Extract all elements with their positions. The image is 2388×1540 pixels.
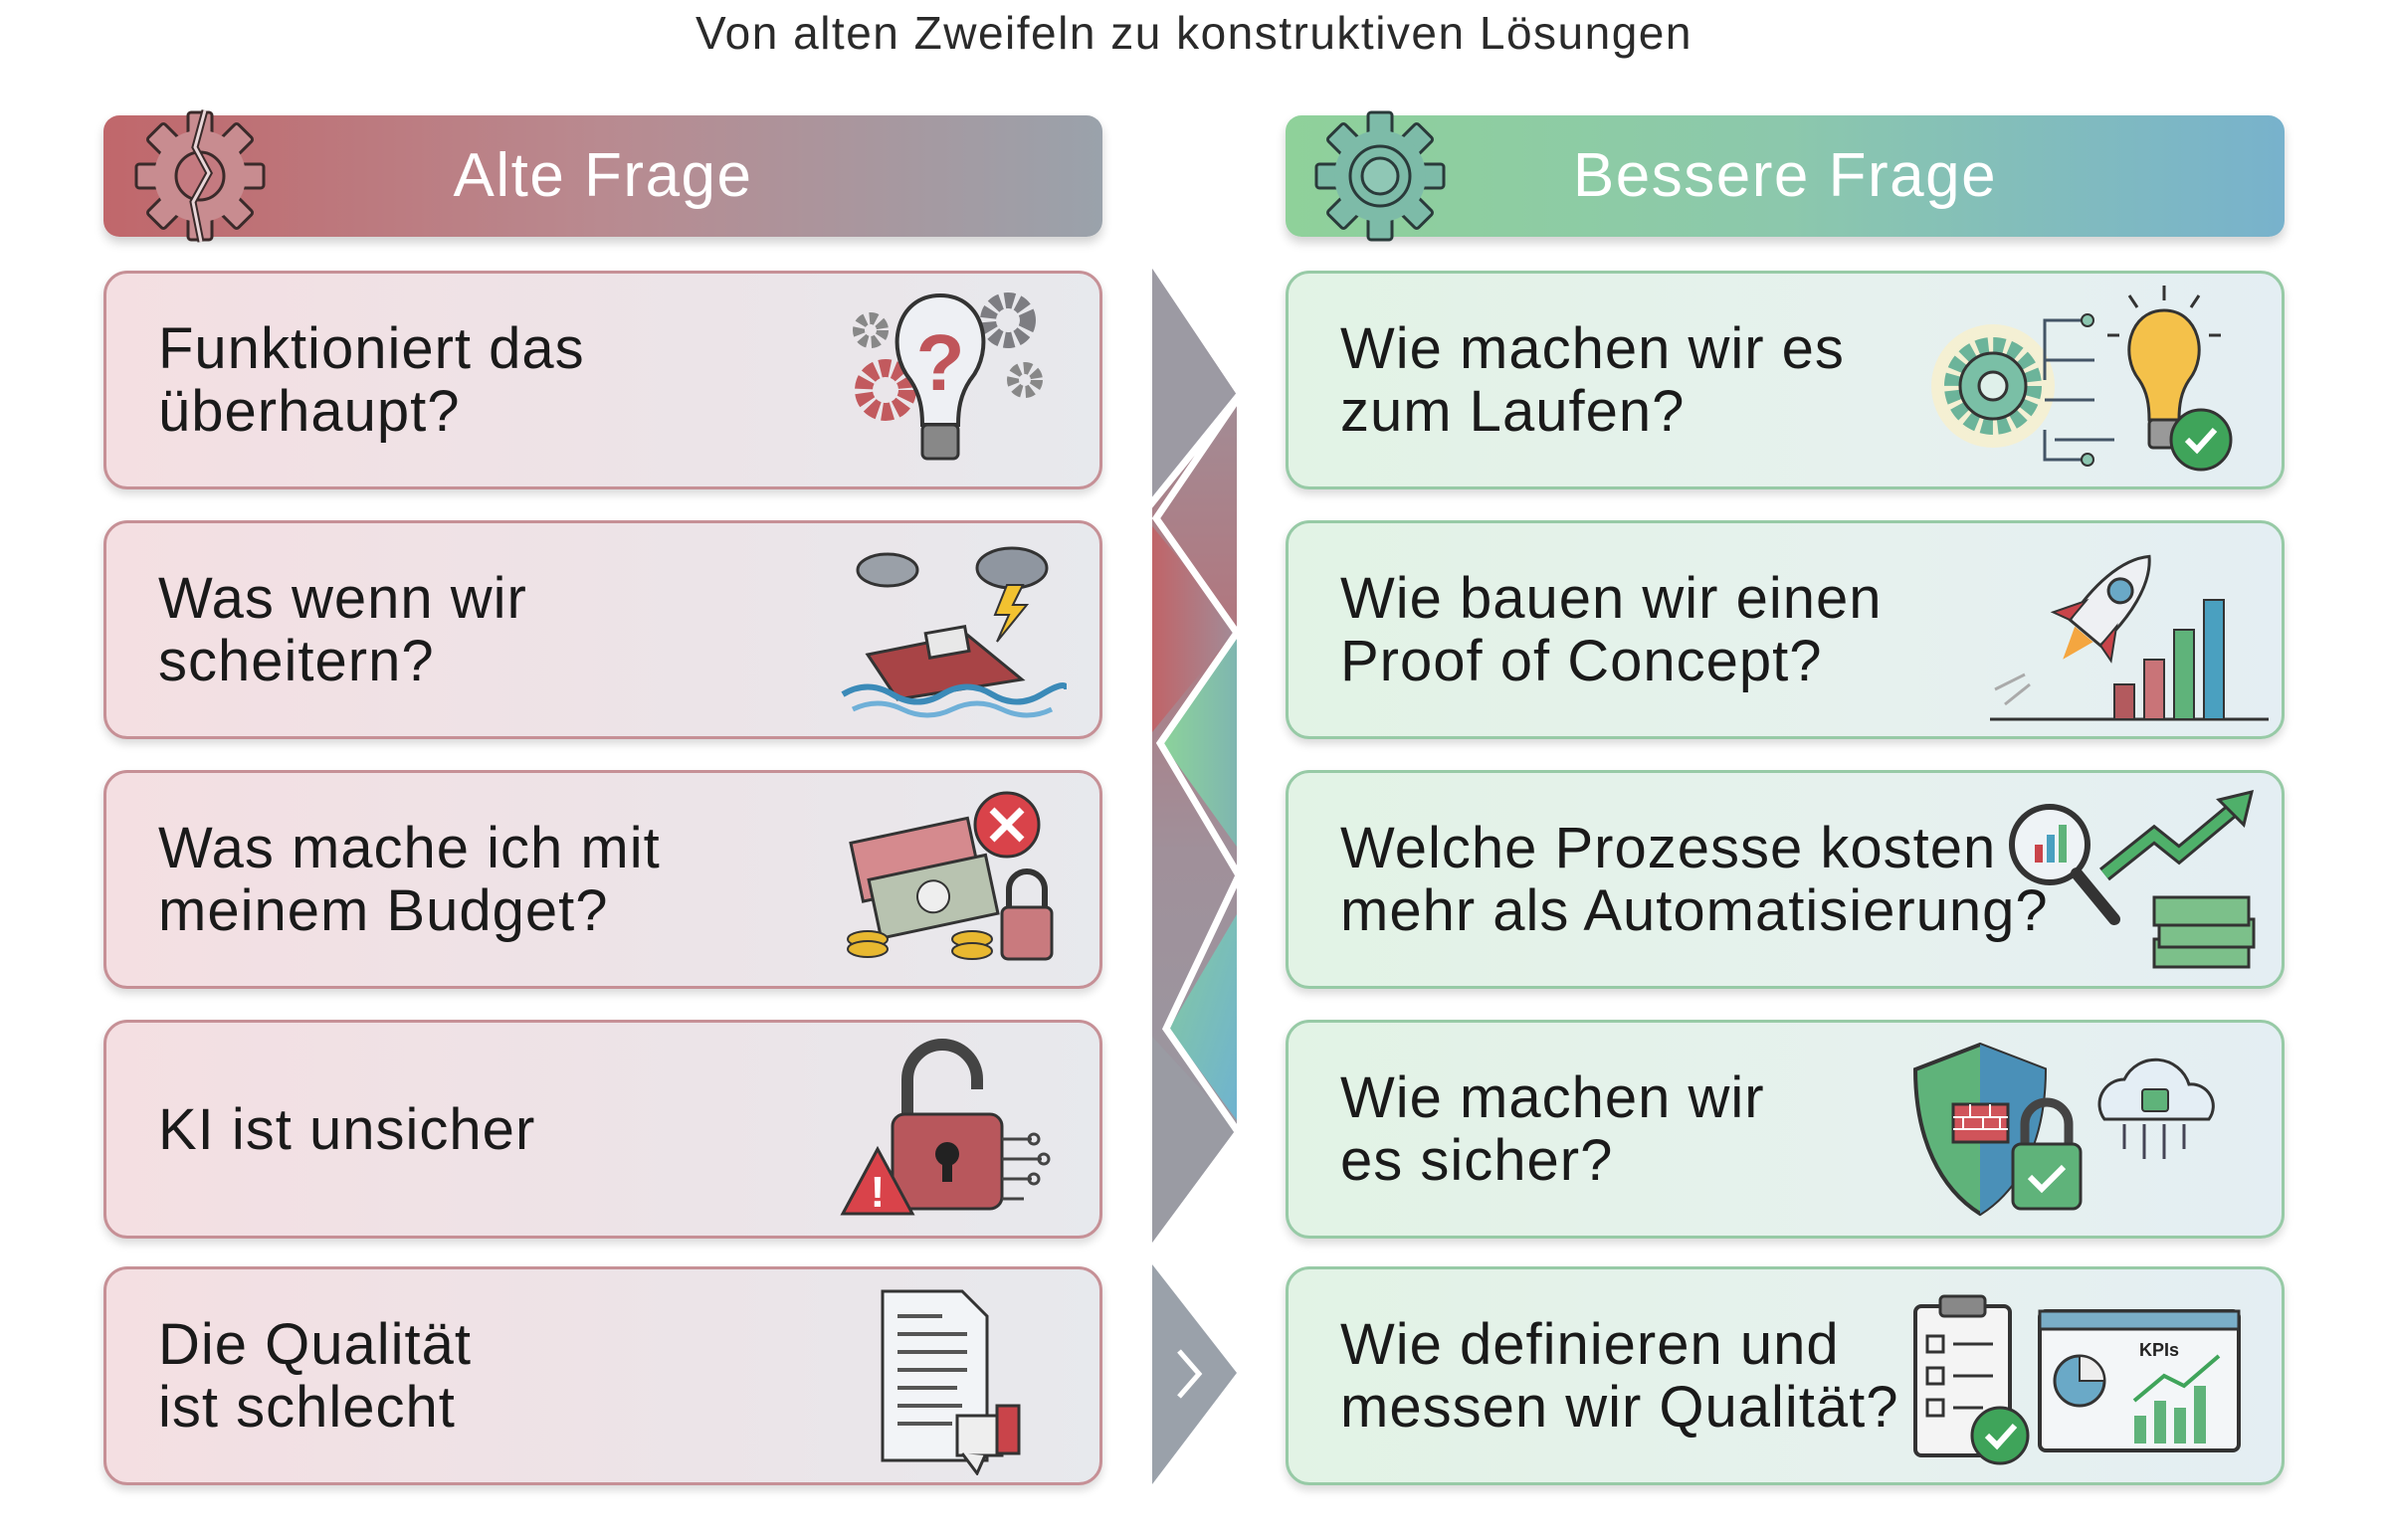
left card 2: scheitern? <box>158 629 435 693</box>
icon: document with thumbs down <box>882 1289 1021 1475</box>
left card 4 <box>103 1020 1102 1239</box>
icon: sinking ship in storm <box>842 547 1067 718</box>
left card 4: KI ist unsicher <box>158 1096 535 1162</box>
right card 3: mehr als Automatisierung? <box>1340 878 2049 943</box>
icon: open padlock with warning: ! <box>871 1168 885 1217</box>
left card 1 <box>103 271 1102 489</box>
right card 4: Wie machen wir <box>1340 1065 1765 1130</box>
icon: gear circuit to bulb with check <box>1931 286 2233 472</box>
left card 1: überhaupt? <box>158 379 460 444</box>
left card 3: meinem Budget? <box>158 878 608 943</box>
icon: rocket and bar chart <box>1990 555 2269 720</box>
right card 5: Wie definieren und <box>1340 1312 1840 1377</box>
icon: gear <box>1315 111 1445 241</box>
right card 4 <box>1286 1020 2285 1239</box>
right card 3: Welche Prozesse kosten <box>1340 816 1996 880</box>
icon: open padlock with warning <box>840 1039 1051 1217</box>
right card 3 <box>1286 770 2285 989</box>
title: Von alten Zweifeln zu konstruktiven Lösungen <box>696 7 1692 59</box>
zigzag band <box>1144 269 1239 1243</box>
right card 5: messen wir Qualität? <box>1340 1375 1899 1440</box>
icon: checklist and KPI dashboard <box>1913 1295 2241 1464</box>
left card 5 <box>103 1266 1102 1485</box>
icon: magnifier, growth arrow, money <box>2009 790 2255 969</box>
header: Bessere Frage: Bessere Frage <box>1573 141 1997 210</box>
left card 5: ist schlecht <box>158 1375 456 1440</box>
right card 2: Wie bauen wir einen <box>1340 566 1883 631</box>
icon: money with X and lock <box>847 792 1053 961</box>
right card 2: Proof of Concept? <box>1340 629 1823 693</box>
right card 1: Wie machen wir es <box>1340 316 1845 381</box>
left card 3 <box>103 770 1102 989</box>
right card 1 <box>1286 271 2285 489</box>
icon: broken gear <box>135 109 265 243</box>
icon: checklist and KPI dashboard: KPIs <box>2139 1340 2179 1360</box>
icon: bulb with question mark and gears: ? <box>916 318 964 407</box>
header: Alte Frage <box>103 115 1102 237</box>
icon: shield, padlock, cloud <box>1913 1043 2215 1216</box>
header: Bessere Frage <box>1286 115 2285 237</box>
icon: bulb with question mark and gears <box>853 292 1043 460</box>
header: Alte Frage: Alte Frage <box>453 141 753 210</box>
left card 2 <box>103 520 1102 739</box>
middle arrow column <box>1152 269 1237 1484</box>
final arrow <box>1152 1264 1237 1484</box>
left card 3: Was mache ich mit <box>158 816 661 880</box>
right card 5 <box>1286 1266 2285 1485</box>
left card 5: Die Qualität <box>158 1312 472 1377</box>
right card 4: es sicher? <box>1340 1128 1613 1193</box>
right card 1: zum Laufen? <box>1340 379 1685 444</box>
left card 1: Funktioniert das <box>158 316 585 381</box>
left card 2: Was wenn wir <box>158 566 527 631</box>
right card 2 <box>1286 520 2285 739</box>
